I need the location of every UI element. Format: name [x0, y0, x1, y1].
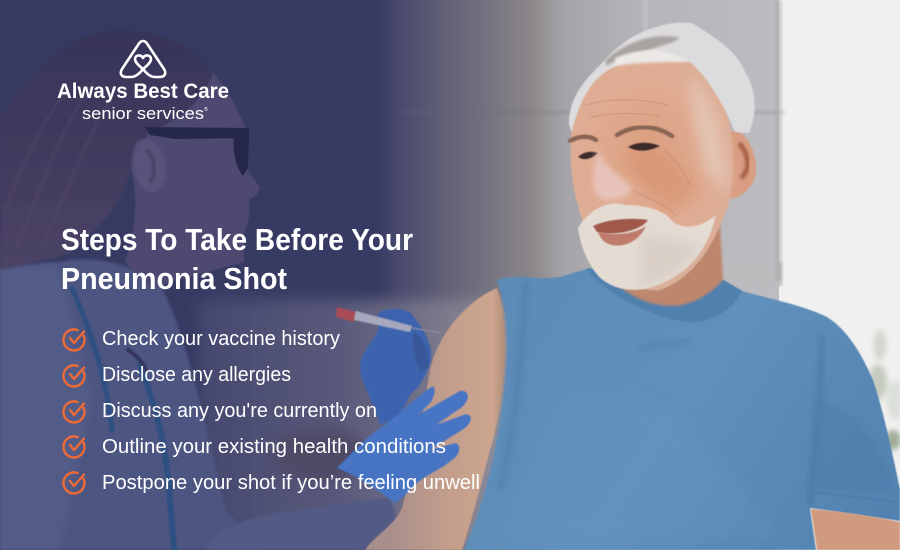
- bare arm: [365, 288, 505, 550]
- checklist: [63, 328, 480, 494]
- nurse hair: [0, 30, 213, 270]
- eyebrows: [570, 127, 672, 141]
- shirt collar: [586, 268, 742, 322]
- nurse sleeve: [205, 497, 395, 550]
- nurse glasses: [145, 127, 249, 176]
- registered mark: ®: [204, 106, 208, 113]
- item 4: Outline your existing health conditions: [102, 436, 446, 458]
- photo: gloved hands and syringe: [336, 307, 471, 503]
- title: Pneumonia Shot: [61, 261, 287, 296]
- upper glove: [360, 309, 431, 425]
- stethoscope: [72, 288, 174, 548]
- item 3: Discuss any you're currently on: [102, 400, 377, 422]
- nurse ear: [133, 139, 166, 192]
- ear: [725, 131, 756, 199]
- nurse face: [125, 72, 260, 288]
- logo wordmark: Always Best Care: [57, 80, 229, 103]
- hair: [569, 23, 755, 133]
- photo: nurse under the navy tint: [0, 30, 395, 550]
- face: [571, 57, 733, 290]
- lower glove: [337, 387, 471, 503]
- icon: house heart logo mark: [121, 41, 165, 77]
- neck: [596, 205, 723, 306]
- logo: [57, 41, 229, 123]
- right forearm: [811, 509, 900, 550]
- logo tagline: senior services: [82, 104, 204, 123]
- item 1: Check your vaccine history: [102, 328, 340, 350]
- photo: man: [365, 23, 900, 550]
- beard: [578, 204, 716, 290]
- title: [61, 222, 413, 296]
- mouth: [593, 219, 648, 234]
- face wrinkles: [585, 100, 690, 216]
- title: Steps To Take Before Your: [61, 222, 413, 257]
- nose: [593, 150, 632, 200]
- syringe: [336, 307, 441, 333]
- nurse coat: [0, 259, 265, 550]
- eyes: [578, 143, 660, 159]
- t-shirt: [464, 268, 900, 550]
- item 2: Disclose any allergies: [102, 364, 291, 386]
- item 5: Postpone your shot if you’re feeling unwell: [102, 472, 480, 494]
- plant: [869, 329, 900, 450]
